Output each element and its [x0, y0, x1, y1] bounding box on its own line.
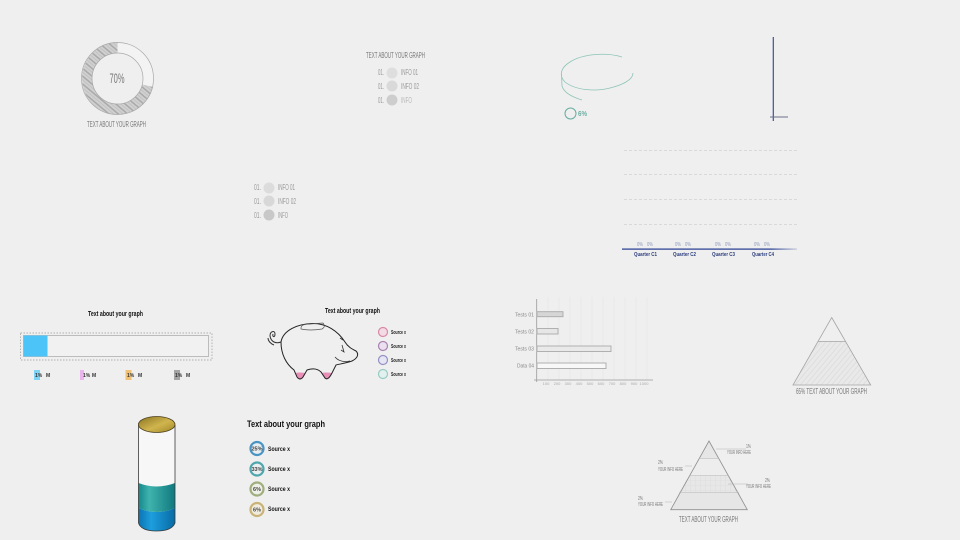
info row 2: 01.: [378, 82, 384, 91]
chart tick labels: 500: [587, 381, 594, 386]
info row 2: INFO 02: [278, 197, 296, 206]
pyramid bands: [671, 441, 747, 510]
progress legend: M: [46, 373, 50, 379]
chart tick labels: 800: [620, 381, 627, 386]
info row 3: INFO: [401, 96, 412, 105]
chart tick labels: 700: [609, 381, 616, 386]
icon: piggy bank: [268, 323, 358, 379]
quarter small values: 0%: [637, 242, 643, 248]
chart row labels: Tests 02: [515, 330, 534, 336]
cylinder legend: 6%: [578, 111, 588, 118]
pyramid callouts: 2%: [765, 478, 770, 484]
info row 2: INFO 02: [401, 82, 419, 91]
legend heading: Text about your graph: [247, 419, 325, 430]
chart bars: [537, 312, 611, 368]
panel: info list middle: [254, 182, 296, 220]
quarter small values: 0%: [685, 242, 691, 248]
pyramid caption: TEXT ABOUT YOUR GRAPH: [679, 515, 738, 524]
donut caption: TEXT ABOUT YOUR GRAPH: [87, 120, 146, 129]
chart row labels: [515, 312, 534, 370]
panel: quarterly chart: [622, 150, 797, 258]
chart row labels: Tests 03: [515, 346, 534, 352]
quarter labels: Quarter C2: [673, 252, 696, 258]
chart tick labels: 300: [565, 381, 572, 386]
chart tick labels: 400: [576, 381, 583, 386]
quarter small values: 0%: [764, 242, 770, 248]
info row 1: [254, 182, 295, 194]
quarter labels: Quarter C3: [712, 252, 735, 258]
piggy heading: Text about your graph: [325, 308, 380, 315]
quarter labels: [634, 252, 775, 258]
info row 1: 01.: [378, 68, 384, 77]
legend row 4: 6%: [253, 508, 261, 514]
info row 1: INFO 01: [401, 68, 418, 77]
panel: test tube cylinder: [138, 416, 175, 531]
cylinder outline: [561, 54, 633, 100]
legend row 2: 33%: [251, 467, 263, 473]
info row 3: 01.: [378, 96, 384, 105]
legend row 4: [250, 503, 291, 516]
progress frame: [20, 333, 212, 360]
piggy legend: [378, 328, 406, 378]
progress legend: 1%: [127, 373, 135, 379]
panel: layered pyramid: [638, 441, 771, 524]
info row 3: [254, 210, 288, 220]
progress legend: 1%: [35, 373, 43, 379]
chart row labels: Tests 01: [515, 312, 534, 318]
quarter small values: [637, 242, 770, 248]
legend row 3: [250, 482, 291, 496]
panel: donut chart 70%: [82, 42, 154, 129]
donut value: 70%: [110, 70, 124, 86]
chart tick labels: [543, 381, 649, 386]
info row 1: INFO 01: [278, 183, 295, 192]
chart tick labels: 900: [631, 381, 638, 386]
chart tick labels: 1000: [640, 381, 649, 386]
panel: piggy bank: [268, 308, 406, 379]
info row 1: 01.: [254, 183, 261, 192]
cylinder glass interior: [138, 425, 175, 487]
progress legend: M: [186, 373, 190, 379]
legend row 4: Source x: [268, 507, 291, 513]
info row 3: [378, 94, 412, 106]
chart tick labels: 100: [543, 381, 550, 386]
triangle outline: [793, 318, 871, 385]
pyramid callouts: YOUR INFO HERE: [638, 502, 663, 508]
quarterly baseline: [622, 248, 797, 250]
piggy legend: Source x: [391, 330, 406, 336]
donut ring: [82, 42, 154, 114]
info row 3: 01.: [254, 211, 261, 220]
quarter small values: 0%: [754, 242, 760, 248]
legend row 2: Source x: [268, 467, 291, 473]
progress legend: 1%: [175, 373, 183, 379]
legend row 3: 6%: [253, 487, 261, 493]
pyramid callouts: 1%: [746, 444, 751, 450]
piggy legend: Source x: [391, 372, 406, 378]
legend row 2: [250, 462, 291, 476]
pyramid callouts: YOUR INFO HERE: [746, 484, 771, 490]
pyramid callouts: 2%: [658, 460, 663, 466]
panel: horizontal bar chart: [515, 297, 653, 386]
quarter labels: Quarter C1: [634, 252, 657, 258]
info row 2: 01.: [254, 197, 261, 206]
info row 2: [254, 196, 296, 206]
panel: triangle 65%: [793, 318, 871, 396]
pyramid outline: [671, 441, 747, 510]
icon: vertical blue axis stroke: [770, 37, 788, 121]
quarter small values: 0%: [647, 242, 653, 248]
pyramid callouts: [638, 444, 771, 508]
cylinder teal level: [138, 483, 175, 512]
legend row 1: [250, 442, 291, 455]
quarter labels: Quarter C4: [752, 252, 775, 258]
piggy legend: Source x: [391, 344, 406, 350]
progress legend: 1%: [83, 373, 91, 379]
panel: cylinder legend: [247, 419, 325, 516]
info list heading: TEXT ABOUT YOUR GRAPH: [366, 51, 425, 60]
chart tick labels: 600: [598, 381, 605, 386]
quarter small values: 0%: [675, 242, 681, 248]
piggy legend: Source x: [391, 358, 406, 364]
progress legend: M: [92, 373, 96, 379]
pyramid callouts: 2%: [638, 496, 643, 502]
cylinder blue level: [138, 508, 175, 531]
progress fill: [24, 336, 48, 356]
cylinder gold top: [138, 416, 175, 432]
triangle caption: 65% TEXT ABOUT YOUR GRAPH: [796, 387, 867, 396]
cylinder glass outline: [138, 425, 175, 531]
panel: info list top: [366, 51, 425, 106]
quarter small values: 0%: [725, 242, 731, 248]
progress legend: [34, 370, 190, 380]
legend row 1: Source x: [268, 447, 291, 453]
chart row labels: Data 04: [517, 364, 534, 370]
pyramid callouts: YOUR INFO HERE: [658, 467, 683, 473]
info row 1: [378, 68, 418, 78]
legend row 1: 25%: [251, 446, 263, 452]
panel: progress bar: [20, 311, 212, 380]
chart tick labels: 200: [554, 381, 561, 386]
chart axes: [534, 299, 653, 382]
progress heading: Text about your graph: [88, 311, 143, 318]
quarter small values: 0%: [715, 242, 721, 248]
info row 3: INFO: [278, 211, 288, 220]
triangle fill: [793, 342, 870, 385]
progress legend: M: [138, 373, 142, 379]
pyramid callouts: YOUR INFO HERE: [727, 450, 751, 456]
legend row 3: Source x: [268, 487, 291, 493]
panel: partial cylinder sketch: [561, 54, 633, 119]
progress track: [24, 336, 208, 356]
info row 2: [378, 80, 419, 92]
